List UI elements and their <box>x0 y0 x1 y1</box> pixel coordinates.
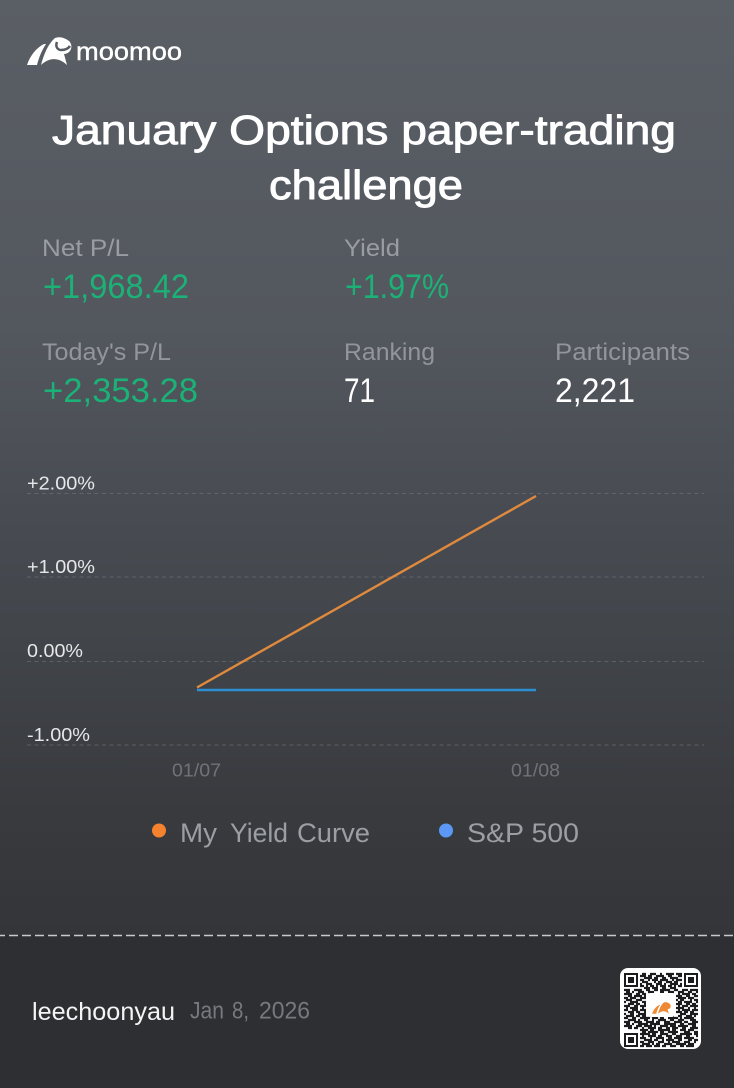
stat: Today's P/L: Today's P/L <box>42 339 171 366</box>
series: S&P 500 line <box>197 689 536 691</box>
stat: Today's P/L <box>42 339 198 410</box>
stat: Participants: Participants <box>555 339 690 366</box>
x axis labels <box>172 760 560 780</box>
x axis labels: 01/08 <box>511 760 560 780</box>
y axis labels: 0.00% <box>27 641 83 661</box>
date: 2026 <box>259 998 310 1024</box>
legend: My <box>180 818 218 848</box>
title: January Options paper-trading <box>52 107 676 153</box>
legend <box>152 818 579 848</box>
username: leechoonyau <box>32 998 175 1026</box>
date: Jan <box>190 998 224 1024</box>
stat: Participants <box>555 339 690 410</box>
stat: Yield: +1.97% <box>345 268 449 306</box>
stat: Net P/L: Net P/L <box>42 235 129 262</box>
date <box>190 998 310 1024</box>
y axis labels: -1.00% <box>27 725 90 745</box>
x axis labels: 01/07 <box>172 760 221 780</box>
stat: Yield <box>344 235 449 306</box>
footer panel <box>0 935 734 1088</box>
stat: Today's P/L: +2,353.28 <box>43 372 198 410</box>
title <box>52 107 676 208</box>
footer divider <box>0 934 734 936</box>
logo wordmark: moomoo <box>76 38 182 66</box>
date: 8, <box>232 998 249 1024</box>
legend: Curve <box>297 818 370 848</box>
QR code <box>620 968 701 1049</box>
legend: Yield <box>230 818 288 848</box>
stat: Net P/L: +1,968.42 <box>43 268 189 306</box>
stat: Yield: Yield <box>344 235 400 262</box>
stat: Participants: 2,221 <box>555 372 635 410</box>
y axis labels: +1.00% <box>27 557 95 577</box>
title: challenge <box>269 162 463 208</box>
y axis labels <box>27 474 95 745</box>
stat: Ranking: 71 <box>344 372 375 410</box>
y axis labels: +2.00% <box>27 474 95 494</box>
stat: Ranking <box>344 339 435 410</box>
icon: QR centre logo <box>652 1002 671 1014</box>
stat: Net P/L <box>42 235 189 306</box>
line chart <box>27 474 704 780</box>
stat: Ranking: Ranking <box>344 339 435 366</box>
legend: S&P 500 <box>467 818 579 848</box>
QR centre patch <box>649 993 674 1017</box>
series: my yield curve line <box>197 496 536 688</box>
icon: moomoo bull logo <box>27 37 71 65</box>
